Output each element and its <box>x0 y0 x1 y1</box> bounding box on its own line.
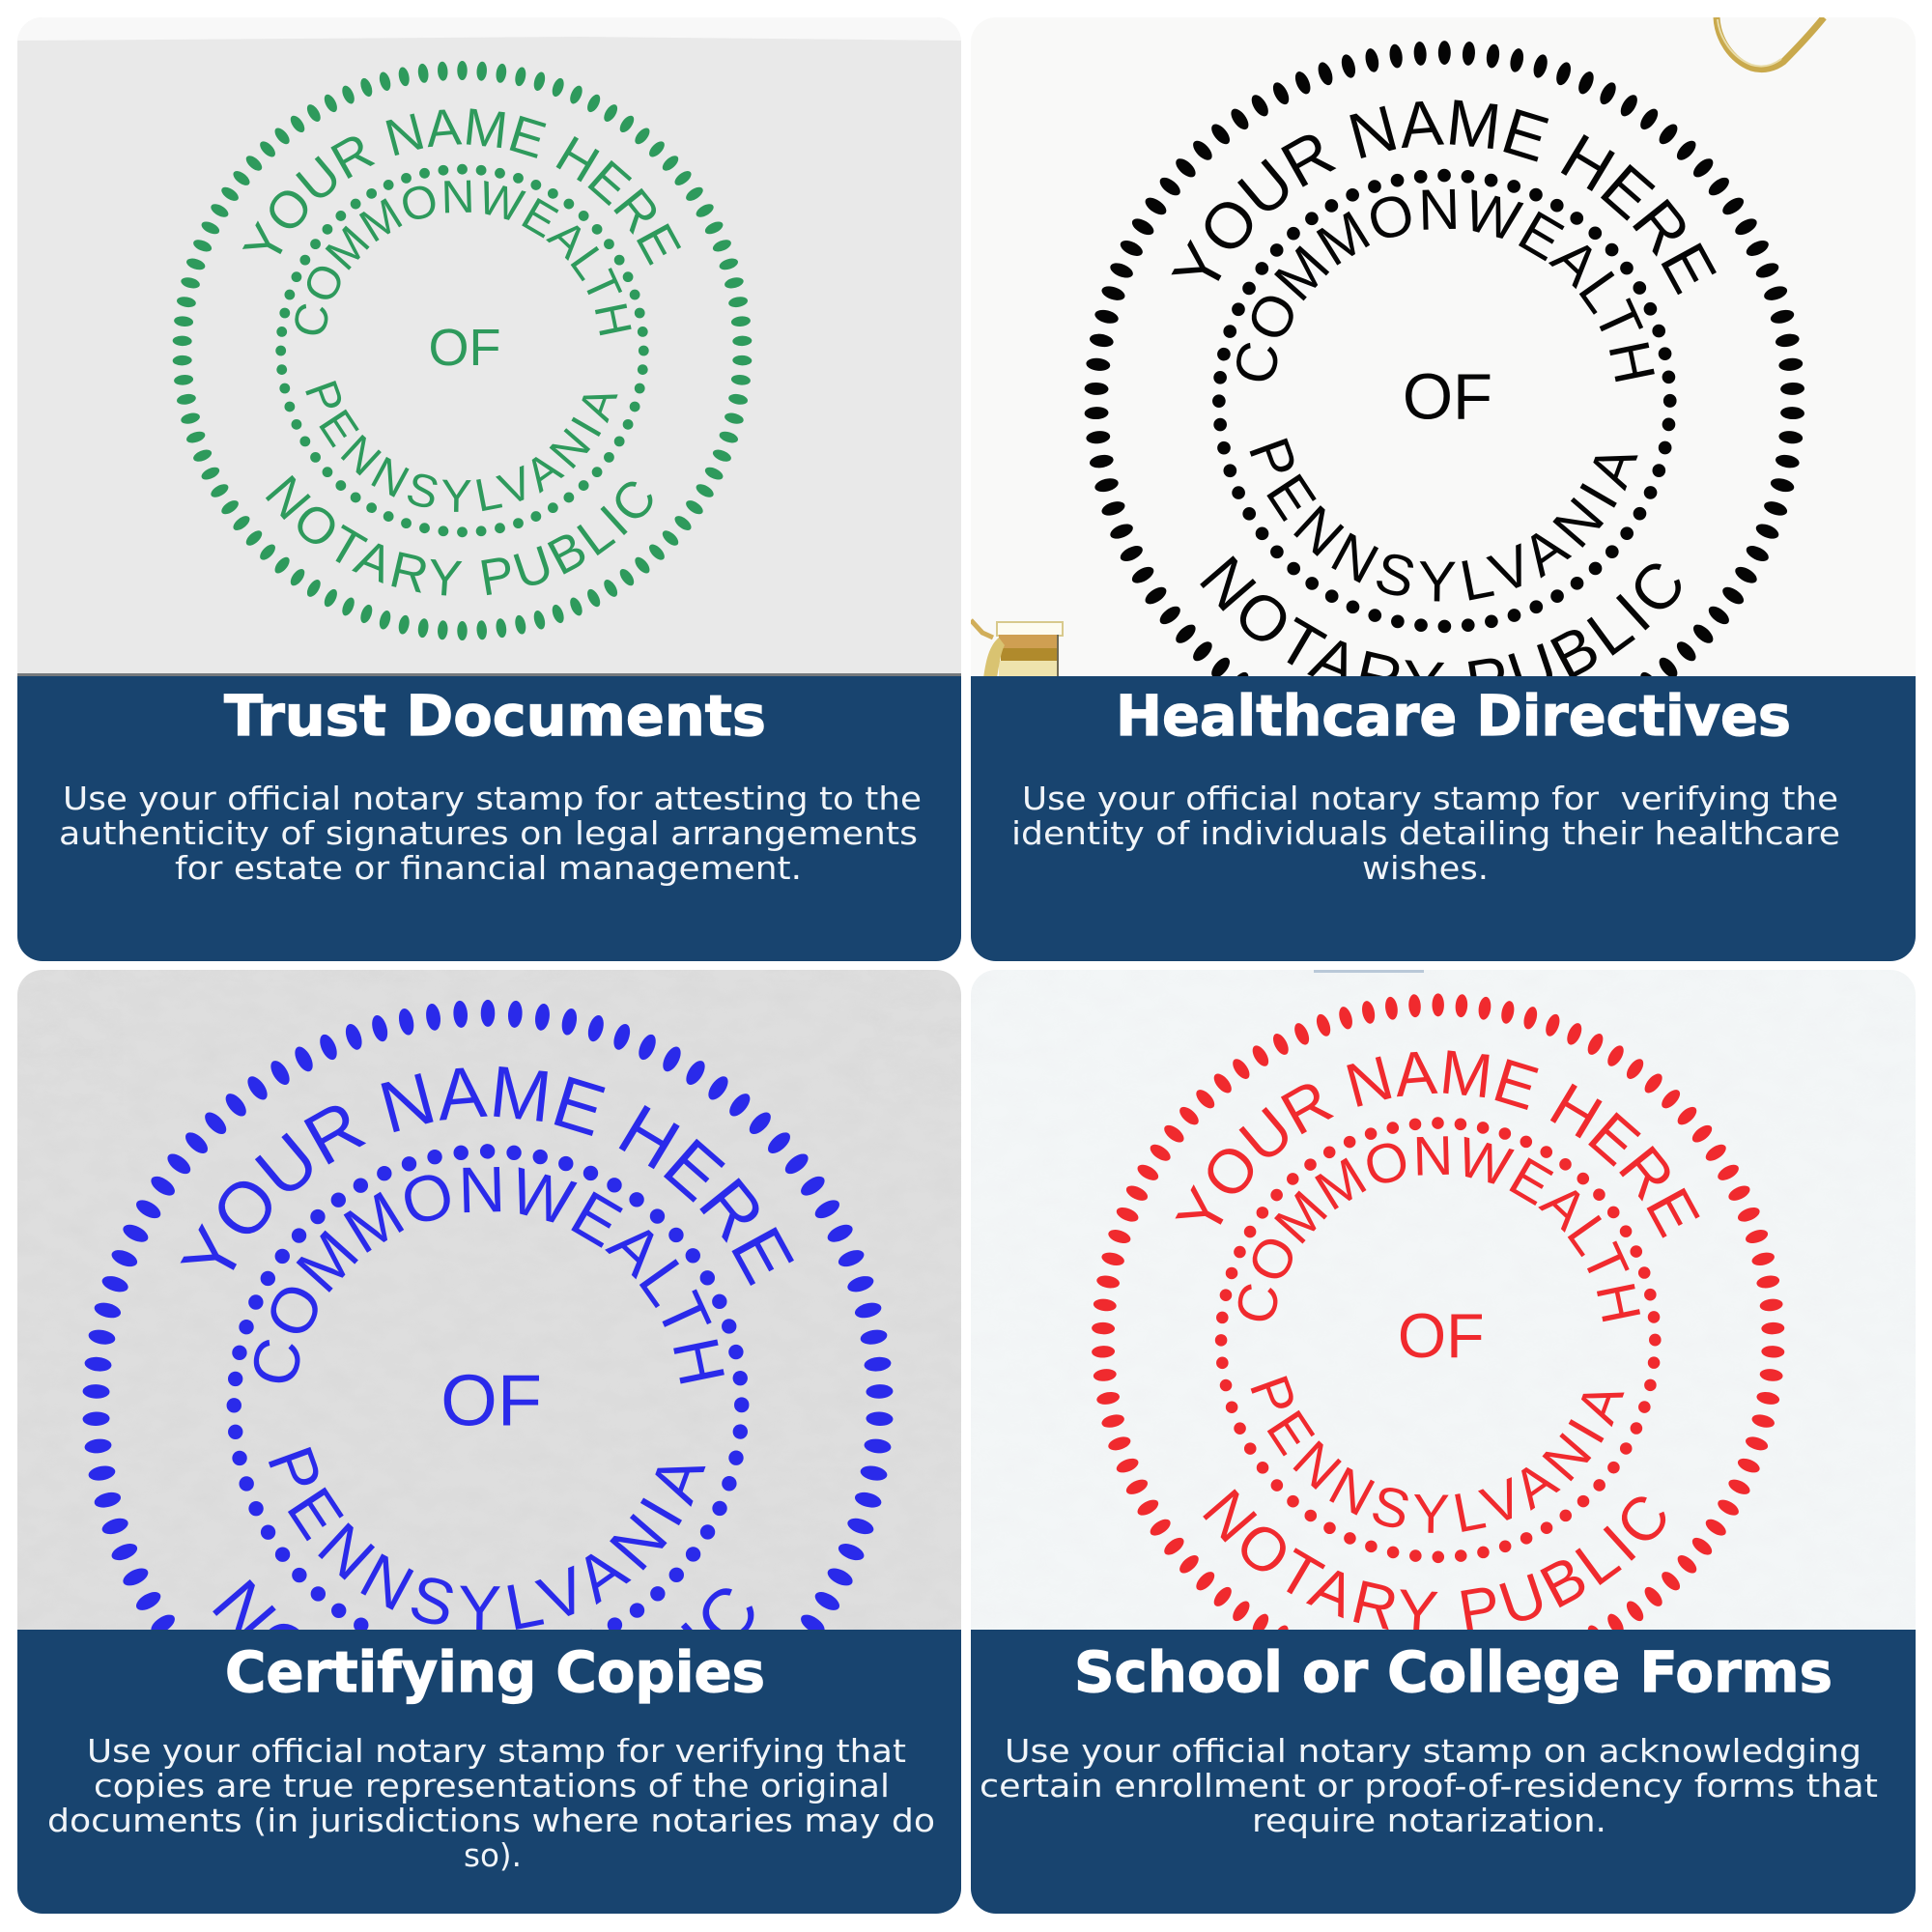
body text: authenticity of signatures on legal arrangements <box>59 814 918 852</box>
icon: gold binder clip bottom left <box>971 620 1063 678</box>
panel: certifying copies <box>17 970 961 1914</box>
panel: healthcare directives <box>971 17 1916 961</box>
stamp: red: OF <box>1398 1301 1485 1371</box>
stamp: blue: COMMONWEALTH <box>253 1167 724 1383</box>
stamp: red: PENNSYLVANIA <box>1250 1376 1625 1533</box>
heading: Trust Documents <box>224 683 766 749</box>
icon: gold paperclip top right <box>1717 17 1824 70</box>
stamp: blue: NOTARY PUBLIC <box>213 1579 753 1630</box>
panel: school or college forms <box>971 970 1916 1914</box>
stamp: green: OF <box>429 319 500 377</box>
body text: for estate or financial management. <box>175 849 802 887</box>
body text: documents (in jurisdictions where notaries may do <box>47 1802 935 1839</box>
body text: Use your official notary stamp on acknowledging <box>1005 1732 1861 1770</box>
stamp: black <box>1084 41 1804 676</box>
caption panel <box>17 676 961 961</box>
body text: Use your official notary stamp for verifying the <box>1022 780 1838 817</box>
heading: Certifying Copies <box>225 1639 765 1705</box>
caption panel <box>17 1630 961 1914</box>
stamp: black: YOUR NAME HERE <box>1171 99 1717 296</box>
body text: copies are true representations of the original <box>94 1767 890 1804</box>
caption panel <box>971 676 1916 961</box>
stamp: green <box>172 61 752 640</box>
stamp: green: COMMONWEALTH <box>295 180 632 336</box>
photo background: paper <box>17 17 961 684</box>
stamp: blue: PENNSYLVANIA <box>269 1447 705 1630</box>
heading: Healthcare Directives <box>1116 683 1791 749</box>
body text: Use your official notary stamp for verifying that <box>87 1732 906 1770</box>
body text: wishes. <box>1362 849 1489 887</box>
body text: Use your official notary stamp for attesting to the <box>63 780 922 817</box>
stamp: red <box>1092 993 1785 1630</box>
stamp: red: COMMONWEALTH <box>1238 1136 1640 1321</box>
stamp: red: NOTARY PUBLIC <box>1203 1489 1665 1630</box>
stamp: black: OF <box>1403 361 1492 434</box>
body text: identity of individuals detailing their healthcare <box>1011 814 1840 852</box>
photo background: desk with clips <box>971 17 1827 676</box>
body text: so). <box>464 1836 522 1874</box>
stamp: green: NOTARY PUBLIC <box>265 475 653 595</box>
photo background: white textured paper <box>971 970 1916 1636</box>
stamp: black: PENNSYLVANIA <box>1250 439 1638 601</box>
body text: certain enrollment or proof-of-residency forms that <box>980 1767 1878 1804</box>
body text <box>1014 785 1839 879</box>
heading: School or College Forms <box>1074 1639 1833 1705</box>
panel: trust documents <box>17 17 961 961</box>
body text <box>47 1732 935 1874</box>
stamp: black: NOTARY PUBLIC <box>1200 555 1681 676</box>
stamp: black: COMMONWEALTH <box>1236 189 1655 383</box>
stamp: blue: OF <box>440 1361 542 1442</box>
body text <box>980 1732 1878 1839</box>
body text <box>59 780 922 887</box>
stamp: green: YOUR NAME HERE <box>242 108 681 266</box>
stamp: red: YOUR NAME HERE <box>1175 1050 1700 1238</box>
caption panel <box>971 1630 1916 1914</box>
body text: require notarization. <box>1252 1802 1606 1839</box>
stamp: green: PENNSYLVANIA <box>305 381 618 512</box>
stamp: blue <box>83 999 893 1630</box>
photo background: gray paper <box>17 970 961 1636</box>
stamp: blue: YOUR NAME HERE <box>180 1066 794 1286</box>
